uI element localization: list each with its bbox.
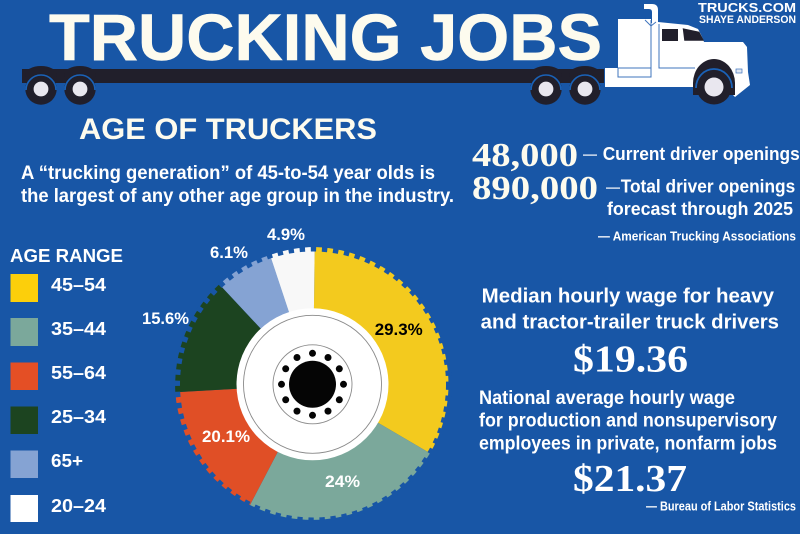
truck cab bbox=[605, 4, 750, 104]
stat: national average wage: for production and nonsupervisory bbox=[479, 410, 777, 432]
number: 48,000: 48,000 bbox=[472, 137, 578, 174]
value labels: 24% bbox=[325, 472, 360, 491]
slice 25–34 bbox=[175, 284, 313, 392]
stat: national average wage bbox=[479, 387, 796, 514]
number: $21.37: $21.37 bbox=[573, 458, 687, 500]
legend item 35–44 bbox=[10, 318, 106, 346]
value labels: 15.6% bbox=[142, 309, 189, 328]
legend item 20–24 bbox=[10, 495, 106, 522]
slice 65+ bbox=[219, 255, 313, 384]
legend item 45–54 bbox=[10, 274, 106, 302]
legend item 35–44: 35–44 bbox=[51, 319, 106, 339]
chart: tire-shaped donut of age groups bbox=[142, 225, 449, 520]
legend: age range bbox=[10, 246, 123, 522]
stat: median hourly wage: and tractor-trailer truck drivers bbox=[481, 312, 779, 334]
value labels bbox=[142, 225, 423, 491]
value labels: 29.3% bbox=[375, 320, 423, 339]
legend item 45–54: 45–54 bbox=[51, 275, 106, 295]
total driver openings label: Total driver openings bbox=[621, 177, 795, 197]
legend: age range: AGE RANGE bbox=[10, 246, 123, 266]
value labels: 20.1% bbox=[202, 427, 250, 446]
slice 55–64 bbox=[175, 384, 313, 505]
legend item 65+: 65+ bbox=[51, 451, 83, 471]
slice 45–54 bbox=[313, 247, 448, 453]
stat: median hourly wage bbox=[481, 286, 779, 381]
number: 890,000: 890,000 bbox=[472, 170, 598, 207]
value labels: 6.1% bbox=[210, 243, 248, 262]
stat: driver openings bbox=[472, 137, 800, 244]
legend item 20–24: 20–24 bbox=[51, 496, 106, 516]
legend item 55–64: 55–64 bbox=[51, 363, 106, 383]
stat: median hourly wage: Median hourly wage for heavy bbox=[482, 286, 775, 308]
text block: trucking generation intro: the largest of any other age group in the industry. bbox=[21, 185, 454, 207]
legend item 25–34: 25–34 bbox=[51, 407, 106, 427]
legend item 65+ bbox=[10, 450, 83, 478]
stat: national average wage: employees in private, nonfarm jobs bbox=[479, 432, 777, 454]
total driver openings label: forecast through 2025 bbox=[607, 199, 793, 219]
credit: SHAYE ANDERSON bbox=[699, 14, 796, 26]
icon: wheel hub bbox=[236, 308, 388, 460]
text block: trucking generation intro: A “trucking generation” of 45-to-54 year olds is bbox=[21, 162, 435, 184]
slice 35–44 bbox=[250, 384, 430, 520]
stat: national average wage: National average hourly wage bbox=[479, 387, 735, 409]
credit bbox=[698, 0, 796, 26]
text block: trucking generation intro bbox=[21, 162, 454, 207]
value labels: 4.9% bbox=[267, 225, 305, 244]
number: $19.36: $19.36 bbox=[573, 339, 688, 381]
icon: truck illustration bbox=[22, 4, 750, 105]
legend item 55–64 bbox=[10, 362, 106, 390]
legend item 25–34 bbox=[10, 406, 106, 434]
heading: age of truckers: AGE OF TRUCKERS bbox=[79, 113, 377, 146]
slice 20–24 bbox=[270, 247, 315, 384]
trailer bed bbox=[22, 66, 604, 84]
credit: TRUCKS.COM bbox=[698, 0, 796, 15]
title: TRUCKING JOBS bbox=[49, 0, 602, 74]
total driver openings label bbox=[606, 177, 795, 219]
trailer wheels bbox=[25, 73, 601, 105]
